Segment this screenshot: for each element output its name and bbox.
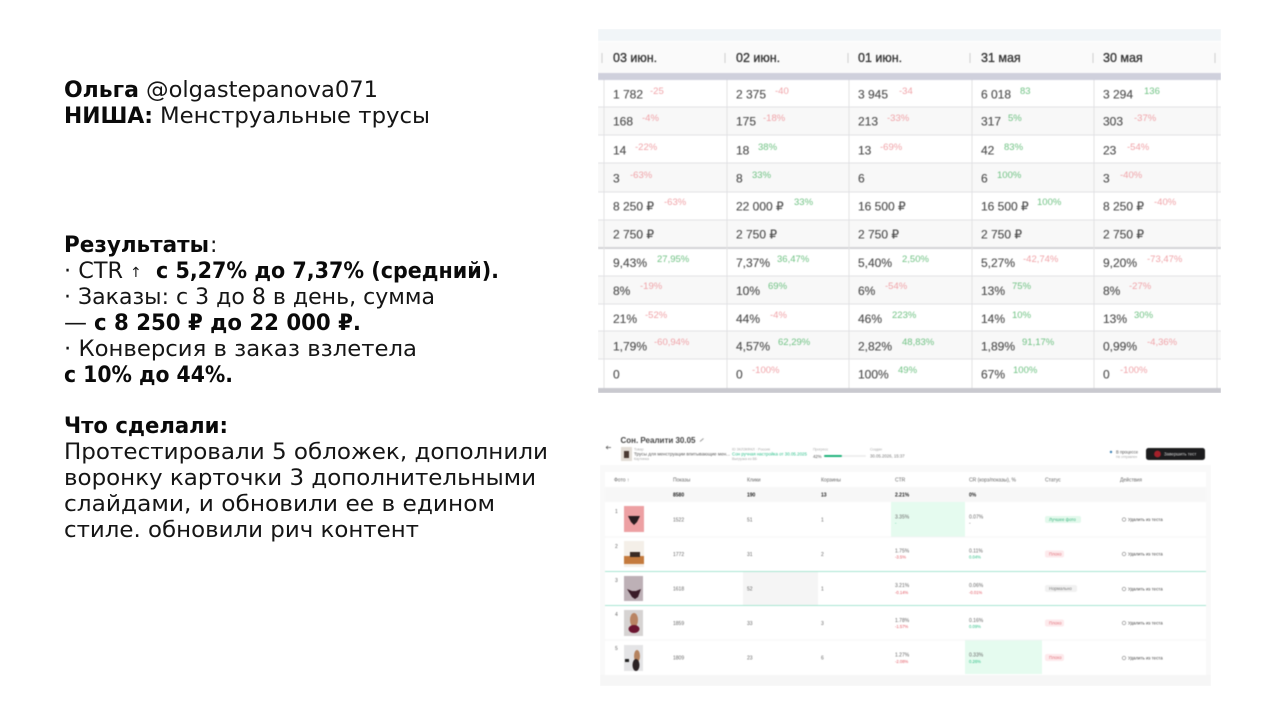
row 1: - xyxy=(895,520,897,526)
row 2: 1.75% xyxy=(895,548,910,554)
row 3: 0.06% xyxy=(969,583,984,589)
table column headers: CR (корз/показы), % xyxy=(969,478,1017,484)
row 5: Плохо xyxy=(1049,655,1062,660)
text block: what was done xyxy=(64,414,548,543)
totals row: 13 xyxy=(821,492,827,498)
table header dates xyxy=(613,51,1143,65)
column: 01 June values: 223% xyxy=(892,310,917,321)
column: 31 May values: 100% xyxy=(1013,365,1038,376)
row 1: - xyxy=(969,520,971,526)
campaign details: Сон ручная настройка от 30.05.2025 xyxy=(732,452,808,456)
column: 02 June values: 22 000 ₽ xyxy=(736,200,784,214)
totals row: 190 xyxy=(747,492,756,498)
row 1: Лучшее фото xyxy=(1049,517,1076,522)
text block: results xyxy=(64,233,499,388)
row 2: 2 xyxy=(821,552,824,558)
test status: В процессе xyxy=(1116,450,1139,454)
row 4: 0.16% xyxy=(969,618,984,624)
column: 02 June values: 33% xyxy=(752,170,772,181)
table header dates: 01 июн. xyxy=(858,51,902,65)
column: 30 May values: -73,47% xyxy=(1147,254,1183,265)
table column headers: Статус xyxy=(1045,478,1061,484)
text block: what was done: воронку карточки 3 дополнительными xyxy=(64,466,536,491)
row 3 xyxy=(615,576,1163,601)
column: 03 June values: 14 xyxy=(613,144,627,158)
text block: results: · Заказы: с 3 до 8 в день, сумма xyxy=(64,285,435,310)
column: 01 June values xyxy=(858,86,935,382)
text block: client and niche: @olgastepanova071 xyxy=(146,78,378,103)
totals row xyxy=(673,492,977,498)
column: 30 May values: 23 xyxy=(1103,144,1117,158)
column: 31 May values: 13% xyxy=(981,284,1005,298)
text block: what was done: Что сделали: xyxy=(64,414,228,439)
column: 30 May values: 3 xyxy=(1103,172,1110,186)
column: 01 June values: 49% xyxy=(898,365,918,376)
row 3: Нормально xyxy=(1049,586,1072,591)
column: 03 June values: -19% xyxy=(640,281,663,292)
text block: results: · CTR xyxy=(64,259,123,284)
column: 02 June values: 7,37% xyxy=(736,256,770,270)
column: 02 June values: -18% xyxy=(763,113,786,124)
column: 30 May values: 3 294 xyxy=(1103,88,1133,102)
column: 31 May values xyxy=(981,86,1062,382)
column: 02 June values: 0 xyxy=(736,368,743,382)
text block: results: · Конверсия в заказ взлетела xyxy=(64,337,417,362)
column: 30 May values: 303 xyxy=(1103,114,1123,128)
row 5: 0.26% xyxy=(969,659,981,664)
test status xyxy=(1110,450,1139,459)
highlighted cells xyxy=(605,487,1206,674)
button: finish test: Завершить тест xyxy=(1164,452,1196,456)
column: 02 June values: 33% xyxy=(794,197,814,208)
column: 02 June values: -100% xyxy=(752,365,780,376)
column: 30 May values xyxy=(1103,86,1183,382)
column: 30 May values: -4,36% xyxy=(1147,337,1178,348)
table column headers: Фото ↑ xyxy=(614,478,629,484)
table column headers: Действия xyxy=(1120,476,1142,484)
row 3: Удалить из теста xyxy=(1128,586,1163,592)
text block: results: Результаты xyxy=(64,233,209,258)
column: 03 June values: 1,79% xyxy=(613,340,647,354)
row 4: 0.09% xyxy=(969,624,981,629)
text block: results: с 8 250 ₽ до 22 000 ₽. xyxy=(94,311,361,336)
column: 02 June values: 69% xyxy=(768,281,788,292)
column: 02 June values: 10% xyxy=(736,284,760,298)
table header dates: 31 мая xyxy=(981,51,1021,65)
row 2: 2 xyxy=(615,544,618,550)
column: 01 June values: 2,50% xyxy=(902,254,929,265)
column: 03 June values: -60,94% xyxy=(654,337,690,348)
row 3: 52 xyxy=(747,586,753,592)
row 1: Удалить из теста xyxy=(1128,517,1163,522)
column: 01 June values: -33% xyxy=(887,113,910,124)
row 2: -3.5% xyxy=(895,554,906,560)
row 1: 1522 xyxy=(673,518,684,524)
column: 02 June values: 4,57% xyxy=(736,340,770,354)
row 4: Удалить из теста xyxy=(1128,620,1163,626)
column: 31 May values: 1,89% xyxy=(981,340,1015,354)
row 4: -1.57% xyxy=(895,624,909,629)
table header dates: 30 мая xyxy=(1103,51,1143,65)
column: 01 June values: 2 750 ₽ xyxy=(858,228,899,242)
totals row: 8580 xyxy=(673,492,684,498)
column: 31 May values: 14% xyxy=(981,312,1005,326)
column: 31 May values: 91,17% xyxy=(1022,337,1055,348)
text block: what was done: Протестировали 5 обложек, дополнили xyxy=(64,440,548,465)
column: 31 May values: 5,27% xyxy=(981,256,1015,270)
table column headers: Показы xyxy=(673,478,691,484)
row 5: Удалить из теста xyxy=(1128,656,1163,660)
column: 01 June values: 100% xyxy=(858,368,889,382)
column: 03 June values: 168 xyxy=(613,114,633,128)
column: 30 May values: -40% xyxy=(1154,197,1177,208)
text block: client and niche: НИША: xyxy=(64,104,153,129)
row 4: Плохо xyxy=(1049,620,1062,626)
column: 31 May values: 100% xyxy=(997,170,1022,181)
row 3: 3 xyxy=(615,578,618,584)
table column headers: Корзины xyxy=(821,478,841,484)
column: 03 June values: 0 xyxy=(613,368,620,382)
column: 01 June values: 2,82% xyxy=(858,340,892,354)
column: 02 June values: 36,47% xyxy=(777,254,810,265)
row 1: 51 xyxy=(747,518,753,524)
column: 03 June values: -4% xyxy=(642,113,659,124)
text block: results: — xyxy=(64,311,87,336)
column: 31 May values: 6 018 xyxy=(981,88,1011,102)
column: 02 June values: 38% xyxy=(758,142,778,153)
column: 31 May values: 42 xyxy=(981,144,995,158)
product summary: Трусы для менструации впитывающие мен... xyxy=(634,452,730,456)
icon: pencil xyxy=(700,438,704,442)
column: 01 June values: 46% xyxy=(858,312,882,326)
row 2: 1772 xyxy=(673,552,684,558)
column: 01 June values: 213 xyxy=(858,114,878,128)
column: 01 June values: 16 500 ₽ xyxy=(858,200,906,214)
table column headers xyxy=(614,476,1142,484)
column: 02 June values: -4% xyxy=(770,310,787,321)
column: 30 May values: 9,20% xyxy=(1103,256,1137,270)
row 4: 33 xyxy=(747,621,753,627)
progress bar xyxy=(813,448,866,459)
column: 03 June values: -63% xyxy=(630,170,653,181)
column: 01 June values: 48,83% xyxy=(902,337,935,348)
row 2: Удалить из теста xyxy=(1128,552,1163,556)
column: 30 May values: -37% xyxy=(1134,113,1157,124)
panel: daily metrics table xyxy=(598,29,1221,393)
column: 03 June values: 2 750 ₽ xyxy=(613,228,654,242)
text block: results: с 5,27% до 7,37% (средний). xyxy=(156,259,499,284)
created date: 30.05.2026, 15:37 xyxy=(870,454,905,458)
column: 03 June values: 9,43% xyxy=(613,256,647,270)
row 5: -2.08% xyxy=(895,659,909,664)
column: 30 May values: -40% xyxy=(1120,170,1143,181)
column: 30 May values: 8 250 ₽ xyxy=(1103,200,1144,214)
row 1: 0.07% xyxy=(969,514,984,520)
column: 31 May values: 6 xyxy=(981,172,988,186)
column: 03 June values: 1 782 xyxy=(613,88,643,102)
totals row: 0% xyxy=(969,492,977,498)
text block: results: : xyxy=(210,233,217,258)
row 2 xyxy=(615,541,1163,567)
column: 30 May values: -100% xyxy=(1120,365,1148,376)
text block: client and niche: Ольга xyxy=(64,78,139,103)
row 5: 0.33% xyxy=(969,652,984,658)
column: 31 May values: -42,74% xyxy=(1023,254,1059,265)
column: 31 May values: 5% xyxy=(1008,113,1022,124)
text block: results: ↑ xyxy=(130,265,142,281)
row 3: 1 xyxy=(821,586,824,592)
row 4: 1859 xyxy=(673,621,684,627)
row 3: 1618 xyxy=(673,586,684,592)
row 5: 1809 xyxy=(673,656,684,662)
column: 03 June values: -63% xyxy=(664,197,687,208)
column: 03 June values: -22% xyxy=(635,142,658,153)
column: 03 June values: 21% xyxy=(613,312,637,326)
column: 31 May values: 317 xyxy=(981,114,1001,128)
test title: Сон. Реалити 30.05 xyxy=(620,436,696,445)
column: 30 May values: 8% xyxy=(1103,284,1121,298)
row 1: 1 xyxy=(821,518,824,524)
column: 02 June values xyxy=(736,86,814,382)
row 5 xyxy=(615,645,1163,671)
column: 02 June values: 62,29% xyxy=(778,337,811,348)
column: 30 May values: 0,99% xyxy=(1103,340,1137,354)
row 5: 23 xyxy=(747,656,753,662)
icon: back arrow xyxy=(606,446,611,449)
progress bar: 42% xyxy=(813,454,822,459)
row 4: 3 xyxy=(821,621,824,627)
column: 31 May values: 16 500 ₽ xyxy=(981,200,1029,214)
column: 02 June values: 44% xyxy=(736,312,760,326)
row 1: 1 xyxy=(615,509,618,515)
table column headers: CTR xyxy=(895,478,906,484)
text block: client and niche: Менструальные трусы xyxy=(160,104,430,129)
table column headers: Клики xyxy=(747,478,761,484)
column: 31 May values: 10% xyxy=(1012,310,1032,321)
row 2: 31 xyxy=(747,552,753,558)
column: 31 May values: 83% xyxy=(1004,142,1024,153)
column: 01 June values: 6 xyxy=(858,172,865,186)
campaign details: Выгрузка из ВБ xyxy=(732,457,758,461)
row 1 xyxy=(615,506,1163,532)
row 5: 5 xyxy=(615,646,618,652)
row 4: 4 xyxy=(615,612,618,618)
column: 01 June values: -69% xyxy=(880,142,903,153)
column: 31 May values: 75% xyxy=(1012,281,1032,292)
row 3: -0.01% xyxy=(969,590,983,595)
row 5: 6 xyxy=(821,656,824,662)
column: 02 June values: 2 750 ₽ xyxy=(736,228,777,242)
text block: what was done: слайдами, и обновили ее в едином xyxy=(64,492,495,517)
row 4 xyxy=(615,610,1163,636)
column: 31 May values: 67% xyxy=(981,368,1005,382)
column: 03 June values: 8% xyxy=(613,284,631,298)
column: 30 May values: -54% xyxy=(1127,142,1150,153)
product summary: Картинка xyxy=(634,457,649,461)
text block: results: с 10% до 44%. xyxy=(64,363,233,388)
column: 30 May values: 2 750 ₽ xyxy=(1103,228,1144,242)
column: 30 May values: -27% xyxy=(1129,281,1152,292)
campaign details: ID ЗКЛЗКФКЛ · Россия xyxy=(732,448,770,452)
column: 02 June values: 2 375 xyxy=(736,88,766,102)
row 4: 1.78% xyxy=(895,618,910,624)
row 3: 3.21% xyxy=(895,583,910,589)
column: 31 May values: 100% xyxy=(1037,197,1062,208)
column: 03 June values: 8 250 ₽ xyxy=(613,200,654,214)
test status: Не отправлен xyxy=(1116,455,1137,459)
column: 31 May values: 2 750 ₽ xyxy=(981,228,1022,242)
row 1: 3.35% xyxy=(895,514,910,520)
text block: client and niche xyxy=(64,78,430,129)
column: 01 June values: -54% xyxy=(885,281,908,292)
text block: what was done: стиле. обновили рич контент xyxy=(64,518,419,543)
column: 01 June values: 3 945 xyxy=(858,88,888,102)
row 2: 0.11% xyxy=(969,548,983,554)
button: finish test xyxy=(1146,448,1205,460)
row 5: 1.27% xyxy=(895,652,910,658)
column: 30 May values: 0 xyxy=(1103,368,1110,382)
table header dates: 03 июн. xyxy=(613,51,657,65)
column: 01 June values: 6% xyxy=(858,284,876,298)
column: 02 June values: -40 xyxy=(775,86,789,97)
product summary xyxy=(621,447,730,461)
created date xyxy=(870,448,905,458)
column: 30 May values: 30% xyxy=(1134,310,1154,321)
panel: cover A/B test screenshot xyxy=(600,436,1211,686)
column: 02 June values: 175 xyxy=(736,114,756,128)
column: 02 June values: 18 xyxy=(736,144,750,158)
column: 03 June values: -52% xyxy=(645,310,668,321)
column: 03 June values: 3 xyxy=(613,172,620,186)
row 2: 0.04% xyxy=(969,554,981,560)
totals row: 2.21% xyxy=(895,492,910,498)
column: 03 June values xyxy=(613,86,690,382)
column: 01 June values: 5,40% xyxy=(858,256,892,270)
column: 01 June values: 13 xyxy=(858,144,872,158)
column: 31 May values: 83 xyxy=(1020,86,1031,97)
created date: Создан xyxy=(870,448,882,452)
column: 03 June values: -25 xyxy=(650,86,664,97)
row 3: -0.14% xyxy=(895,590,909,595)
column: 03 June values: 27,95% xyxy=(657,254,690,265)
column: 02 June values: 8 xyxy=(736,172,743,186)
product summary: Товар xyxy=(634,448,644,452)
progress bar: Прогресс xyxy=(813,448,828,452)
column: 01 June values: -34 xyxy=(899,86,913,97)
column: 30 May values: 13% xyxy=(1103,312,1127,326)
table header dates: 02 июн. xyxy=(736,51,780,65)
campaign details xyxy=(732,448,808,461)
row 2: Плохо xyxy=(1049,552,1062,556)
column: 30 May values: 136 xyxy=(1144,86,1160,97)
